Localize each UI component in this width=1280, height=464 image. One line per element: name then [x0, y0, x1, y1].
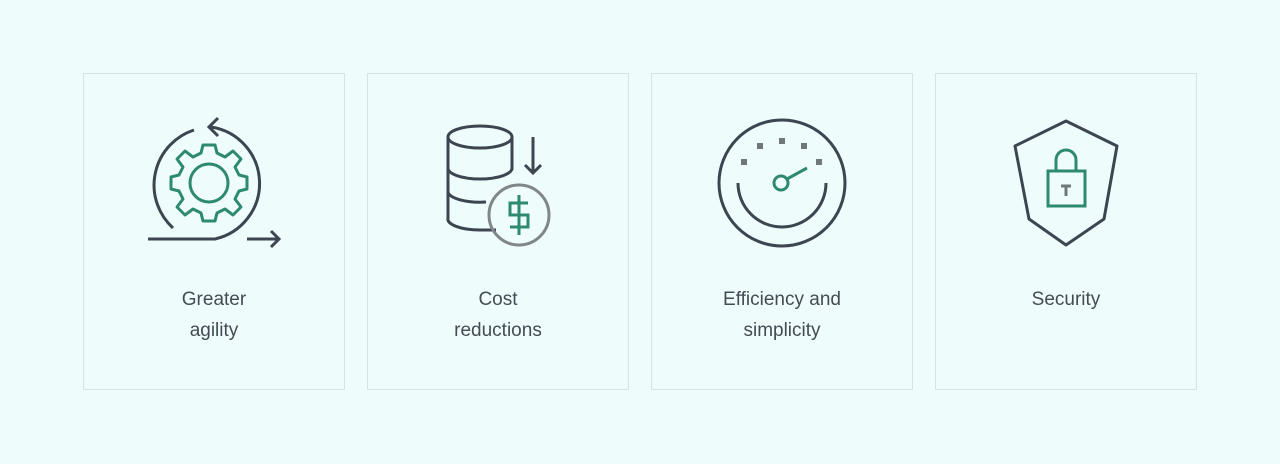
label: greater agility	[182, 289, 246, 341]
icon: database with dollar	[448, 126, 549, 245]
label: cost reductions: Cost	[478, 289, 518, 310]
label: efficiency: simplicity	[743, 320, 821, 341]
icon: gear with cycle arrow	[148, 118, 279, 247]
panel: greater agility	[83, 73, 345, 390]
label: efficiency	[723, 289, 841, 341]
icon: gauge	[719, 120, 845, 246]
panel: cost reductions	[367, 73, 629, 390]
panel: efficiency and simplicity	[651, 73, 913, 390]
label: security: Security	[1032, 289, 1100, 310]
label: cost reductions	[454, 289, 542, 341]
label: greater agility: agility	[190, 320, 238, 341]
panel: security	[935, 73, 1197, 390]
label: efficiency: Efficiency and	[723, 289, 841, 310]
icon: shield with lock	[1015, 121, 1117, 245]
label: cost reductions: reductions	[454, 320, 542, 341]
label: greater agility: Greater	[182, 289, 246, 310]
